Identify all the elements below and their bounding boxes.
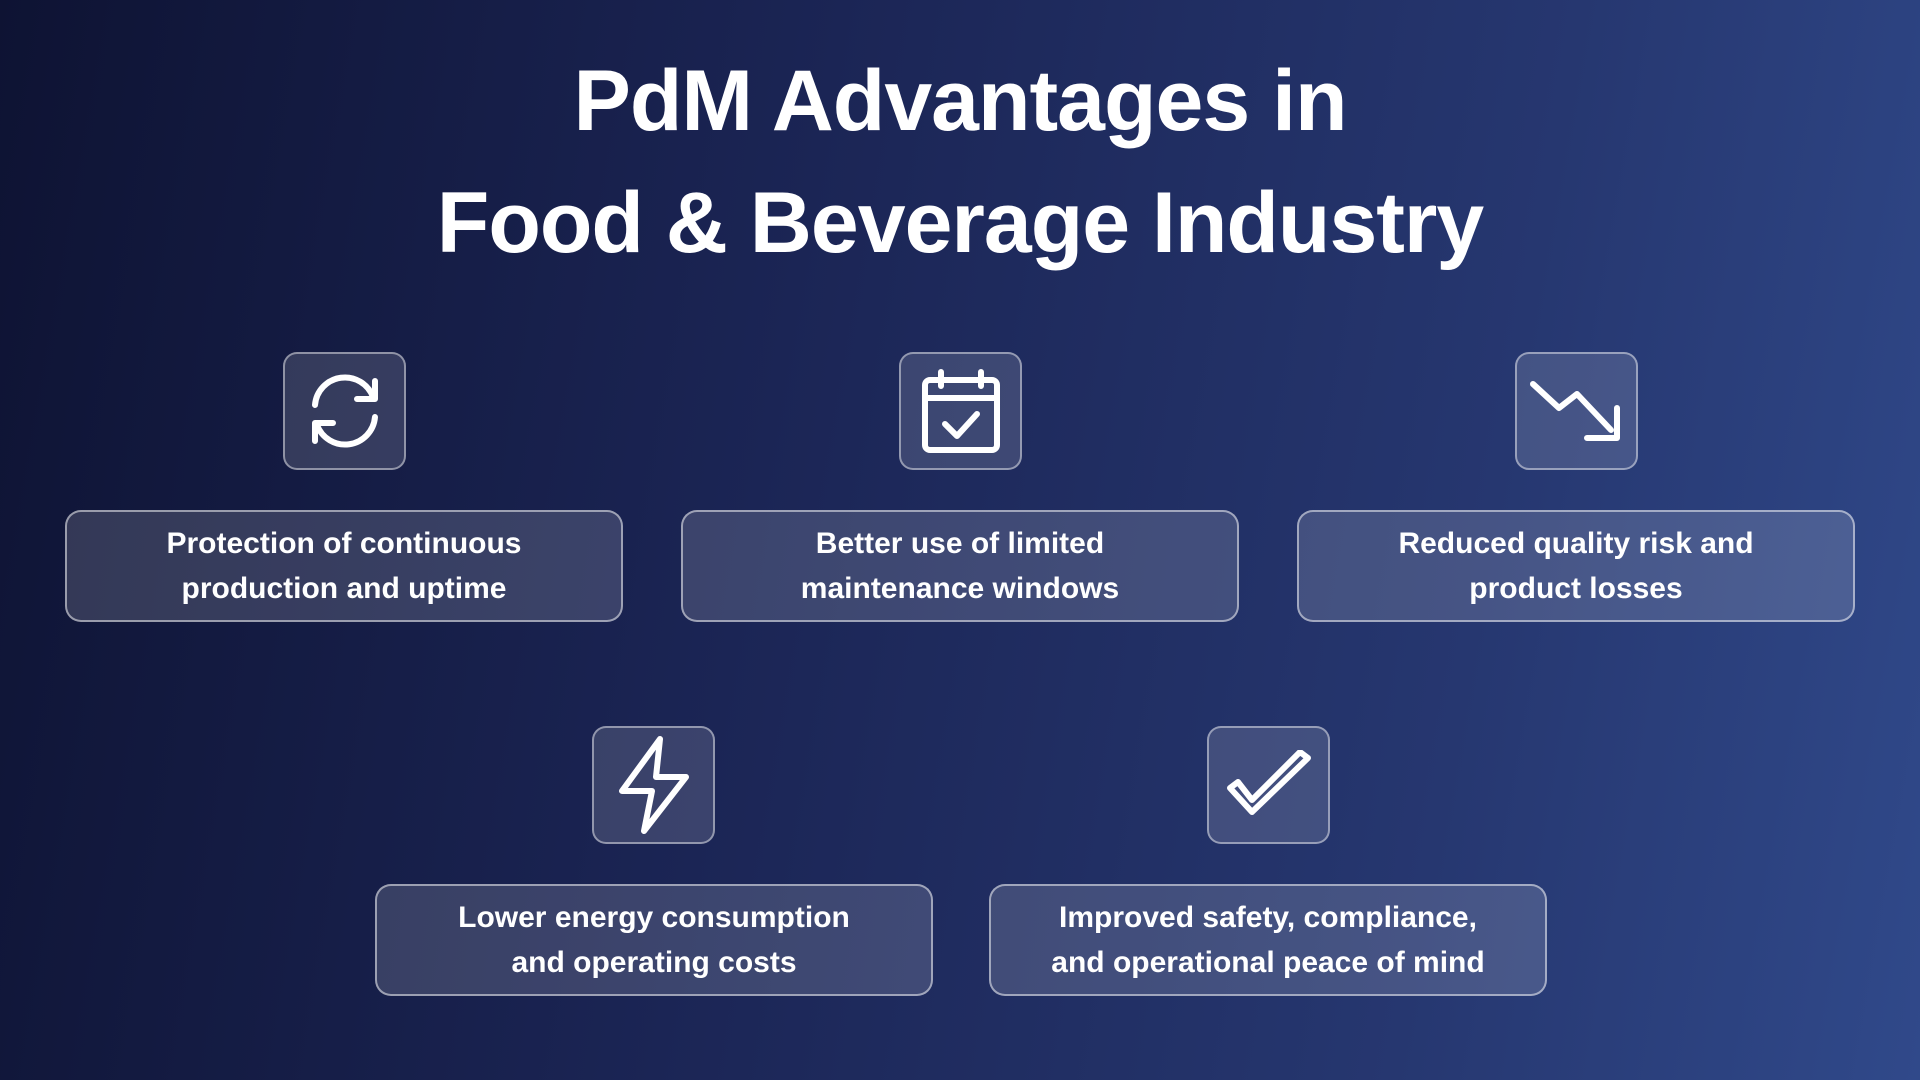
card: maintenance windows: maintenance windows [801, 572, 1119, 605]
card: safety: and operational peace of mind [1051, 946, 1485, 979]
title: Food & Beverage Industry [437, 175, 1483, 271]
card: maintenance windows [681, 510, 1239, 622]
card: quality: product losses [1469, 572, 1683, 605]
card: energy: and operating costs [511, 946, 797, 979]
card: uptime: Protection of continuous [166, 527, 521, 560]
icon: lightning [592, 726, 715, 844]
card: uptime: production and uptime [182, 572, 506, 605]
icon: check [1207, 726, 1330, 844]
card: quality [1297, 510, 1855, 622]
title [437, 53, 1484, 271]
title: PdM Advantages in [573, 53, 1347, 149]
card: maintenance windows: Better use of limited [816, 527, 1104, 560]
card: energy [375, 884, 933, 996]
card: safety: Improved safety, compliance, [1059, 901, 1477, 934]
card: energy: Lower energy consumption [458, 901, 850, 934]
card: uptime [65, 510, 623, 622]
icon: calendar [899, 352, 1022, 470]
icon: trend down [1515, 352, 1638, 470]
icon: refresh [283, 352, 406, 470]
card: safety [989, 884, 1547, 996]
card: quality: Reduced quality risk and [1398, 527, 1754, 560]
